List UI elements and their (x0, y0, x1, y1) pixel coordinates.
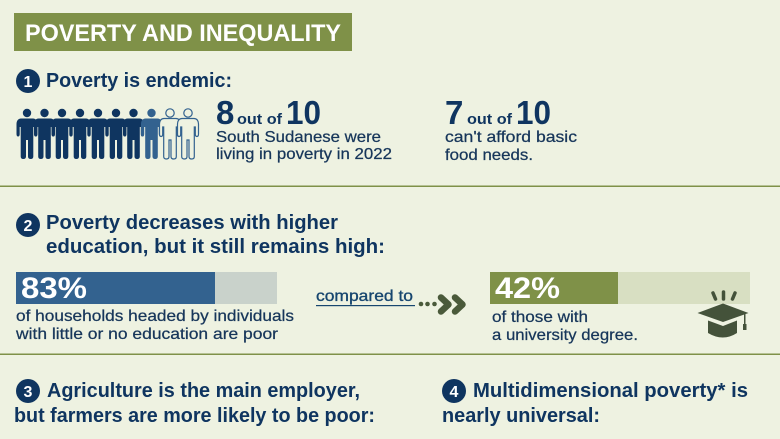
stat: 8 out of 10: 8 (216, 94, 234, 131)
stat: 7 out of 10 (445, 94, 577, 164)
title (14, 13, 352, 51)
section 2 heading (16, 212, 385, 258)
stat: 7 out of 10: can't afford basic (445, 129, 577, 146)
bar: 83% (16, 272, 277, 305)
title: POVERTY AND INEQUALITY (25, 20, 341, 47)
stat: 8 out of 10: South Sudanese were (216, 129, 381, 146)
icon: graduation cap (698, 292, 748, 338)
stat: 8 out of 10: living in poverty in 2022 (216, 146, 392, 163)
caption: 83%: with little or no education are poor (15, 326, 279, 343)
section 2 heading: Poverty decreases with higher (46, 212, 338, 234)
caption: 42%: a university degree. (492, 327, 638, 344)
section 4 heading: nearly universal: (442, 405, 600, 427)
compared to label: compared to (316, 288, 413, 305)
section 4 heading: Multidimensional poverty* is (473, 380, 748, 402)
arrow: dots and chevrons (419, 298, 462, 312)
stat: 7 out of 10: 10 (516, 94, 551, 131)
caption: 83%: of households headed by individuals (16, 308, 294, 325)
caption: 42%: of those with (492, 309, 588, 326)
stat: 7 out of 10: out of (467, 111, 513, 128)
stat: 8 out of 10 (216, 94, 392, 163)
section 2 heading: 2 (24, 218, 33, 235)
stat: 8 out of 10: 10 (286, 94, 321, 131)
bar: 83%: 83% (21, 272, 87, 305)
caption: 83% (15, 308, 294, 343)
stat: 8 out of 10: out of (237, 111, 283, 128)
icon: row of ten people, eight filled (16, 109, 198, 159)
section 1 heading: Poverty is endemic: (46, 70, 232, 92)
bar: 42%: 42% (495, 272, 560, 305)
bar: 42% (490, 272, 750, 305)
section 3 heading: 3 (24, 384, 33, 401)
section 2 heading: education, but it still remains high: (46, 236, 385, 258)
section 3 heading: but farmers are more likely to be poor: (14, 405, 375, 427)
section 1 heading: 1 (24, 74, 33, 91)
stat: 7 out of 10: food needs. (445, 147, 533, 164)
section 4 heading (442, 379, 748, 427)
stat: 7 out of 10: 7 (445, 94, 463, 131)
section 3 heading: Agriculture is the main employer, (47, 380, 360, 402)
section 3 heading (14, 379, 375, 427)
section 4 heading: 4 (450, 384, 459, 401)
caption: 42% (492, 309, 638, 344)
